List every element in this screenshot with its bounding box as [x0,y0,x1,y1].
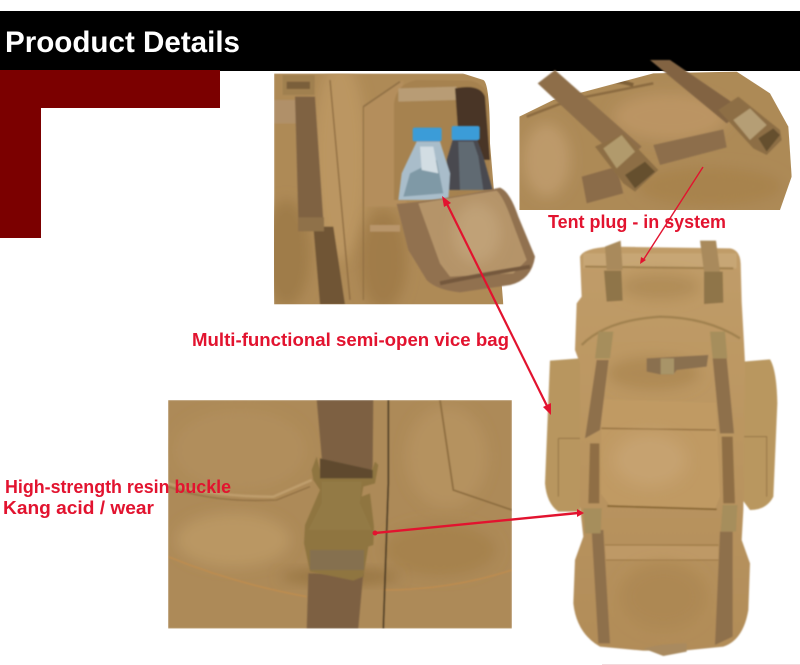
header bar [0,11,800,71]
icon: plastic side-release buckle [304,457,378,581]
photo: backpack front view [545,241,777,656]
photo: top lid with straps [518,60,795,213]
straps and buckles [538,60,782,192]
arrow: resin buckle [372,509,584,536]
arrow: tent plug [640,167,703,264]
faint line at bottom edge [602,664,800,665]
lid seam [582,317,740,345]
label: resin buckle: High-strength resin buckle [5,477,231,497]
pocket flap [397,188,535,292]
arrow: semi-open vice bag [442,196,551,415]
photo: side pocket with water bottles [274,73,536,304]
red corner decoration [0,70,220,238]
pocket interior [394,80,490,200]
label: tent plug: Tent plug - in system [548,212,726,232]
label: acid and wear: Kang acid / wear [3,498,154,518]
icon: water bottles [398,126,493,200]
straps [585,360,609,438]
front pocket [601,399,720,509]
title: Prooduct Details [5,26,240,59]
main body [573,247,750,651]
lower compartment [605,545,718,560]
photo: resin buckle close-up [168,400,512,629]
buckles [604,271,623,302]
label: semi-open vice bag: Multi-functional semi-open vice bag [192,330,509,350]
side pockets [545,358,580,512]
